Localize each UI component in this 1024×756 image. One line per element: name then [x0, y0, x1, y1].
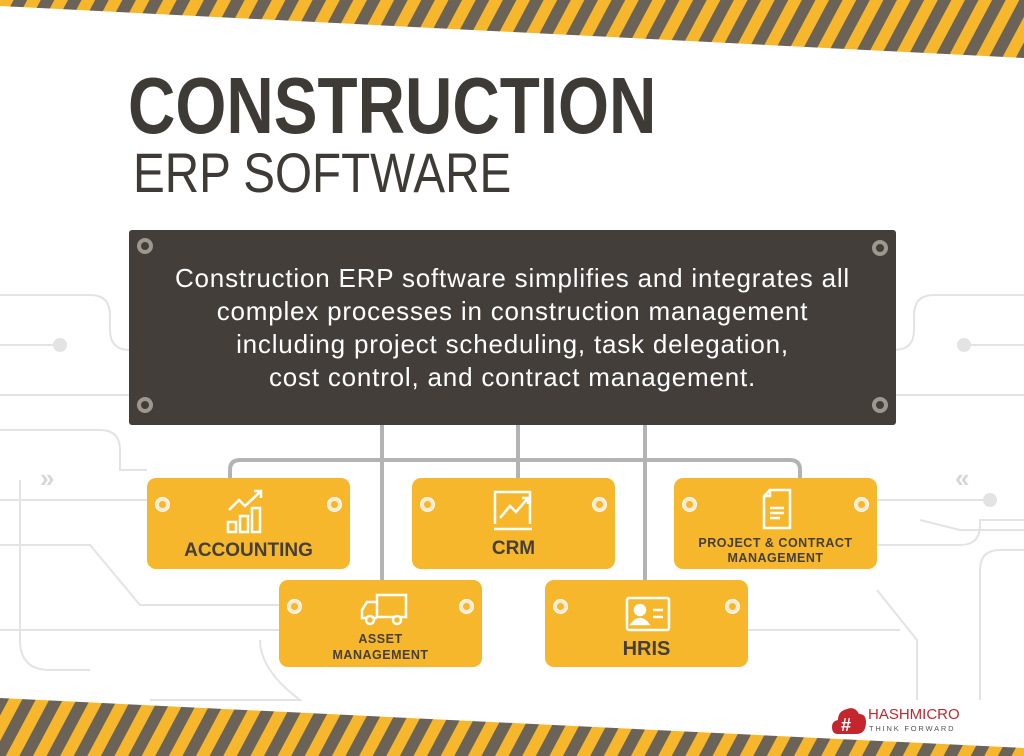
- description panel: [129, 230, 896, 425]
- card: accounting: [147, 478, 350, 569]
- card: project & contract: MANAGEMENT: [728, 551, 823, 565]
- icon: cloud hash: [832, 708, 866, 735]
- card: crm: [412, 478, 615, 569]
- top stripe band: [0, 0, 1024, 58]
- description text: complex processes in construction management: [217, 296, 808, 326]
- background circuit lines: «: [955, 463, 969, 493]
- icon: document: [762, 488, 792, 530]
- icon: cloud hash: #: [841, 715, 851, 735]
- description text: Construction ERP software simplifies and integrates all: [175, 263, 850, 293]
- description text: including project scheduling, task delegation,: [236, 329, 789, 359]
- card: project & contract: [674, 478, 877, 569]
- icon: chart: [494, 490, 532, 530]
- icon: growth bars: [226, 490, 262, 534]
- card: hris: [545, 580, 748, 667]
- logo: hashmicro: HASHMICRO: [868, 706, 960, 723]
- logo: hashmicro: [832, 706, 960, 735]
- icon: truck: [360, 594, 408, 626]
- card: crm: CRM: [492, 538, 535, 559]
- card: project & contract: PROJECT & CONTRACT: [698, 536, 853, 550]
- logo: hashmicro: THINK FORWARD: [869, 724, 955, 733]
- card: asset management: MANAGEMENT: [333, 648, 428, 662]
- card: accounting: ACCOUNTING: [184, 540, 313, 561]
- description text: [175, 263, 850, 392]
- subtitle: ERP SOFTWARE: [133, 141, 511, 204]
- bottom stripe band: [0, 698, 1024, 756]
- card: hris: HRIS: [623, 638, 670, 660]
- icon: id card: [626, 596, 670, 632]
- card: asset management: [279, 580, 482, 667]
- description text: cost control, and contract management.: [269, 362, 756, 392]
- title: CONSTRUCTION: [128, 61, 656, 150]
- connectors: [230, 425, 800, 580]
- chevrons: »: [40, 463, 54, 493]
- card: asset management: ASSET: [358, 632, 403, 646]
